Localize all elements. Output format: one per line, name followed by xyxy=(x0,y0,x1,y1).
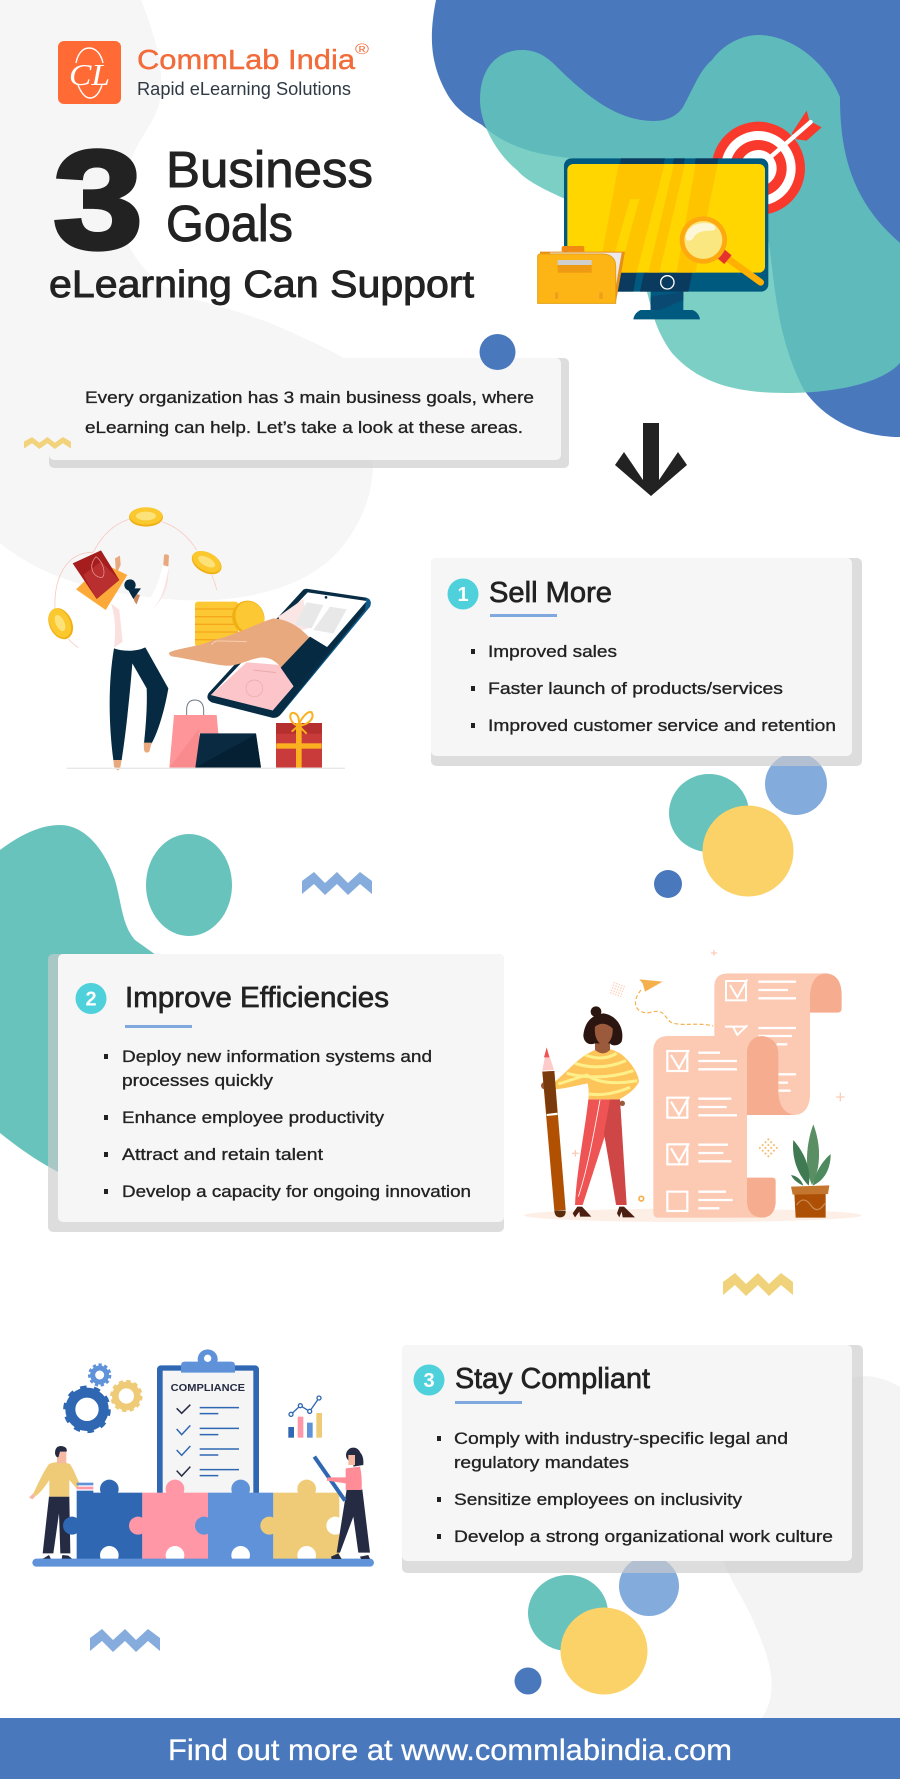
checklist xyxy=(177,1405,239,1476)
potted plant xyxy=(791,1124,831,1218)
number badge 2 xyxy=(76,983,106,1014)
ground line xyxy=(67,766,345,770)
decorative circles: section 3 xyxy=(514,1556,679,1694)
logo tagline: Rapid eLearning Solutions xyxy=(137,79,351,99)
logo mark: CL xyxy=(69,57,110,92)
icon: folder xyxy=(538,246,625,303)
woman figure with pencil xyxy=(314,1448,370,1559)
zigzag: yellow, section 2 xyxy=(723,1273,793,1296)
bullet list: processes quickly xyxy=(122,1071,274,1090)
bullet list: Enhance employee productivity xyxy=(122,1108,385,1127)
pink shopping bag xyxy=(169,700,218,768)
coins in the air xyxy=(43,507,225,643)
heading underline xyxy=(455,1401,522,1404)
panel face xyxy=(58,954,504,1222)
front scroll xyxy=(653,1036,795,1218)
bullet list xyxy=(104,1047,471,1201)
clipboard heading: COMPLIANCE xyxy=(171,1383,245,1394)
heading underline xyxy=(125,1025,192,1028)
bullet list: Sensitize employees on inclusivity xyxy=(454,1490,743,1509)
sparkles and dot patterns xyxy=(572,950,845,1201)
panel: sell more xyxy=(431,558,862,766)
illustration: compliance clipboard and puzzle xyxy=(29,1349,374,1567)
heading: Sell More: Sell More xyxy=(489,577,612,609)
gears xyxy=(65,1365,141,1431)
woman figure xyxy=(541,1006,639,1217)
arrow: pointing down xyxy=(615,423,687,496)
ground shadow xyxy=(524,1209,861,1222)
background blob: teal oval xyxy=(146,834,232,936)
panel face xyxy=(431,558,852,756)
shopping bags held xyxy=(73,550,127,610)
background blob: top-right blue xyxy=(432,0,900,437)
bullet list xyxy=(471,642,836,735)
number badge 3: 3 xyxy=(423,1370,435,1392)
title xyxy=(49,121,474,306)
icon: magnifying glass xyxy=(680,216,761,282)
icon: monitor xyxy=(564,158,768,319)
bullet list: Attract and retain talent xyxy=(122,1145,323,1164)
gift box xyxy=(276,712,322,768)
logo mark xyxy=(58,41,121,104)
pencil xyxy=(542,1047,566,1217)
icon: target with arrow xyxy=(712,111,822,215)
panel face xyxy=(402,1345,852,1561)
zigzag: blue, section 1 xyxy=(302,872,372,895)
footer band xyxy=(0,1718,900,1779)
illustration: shopping woman and phone xyxy=(43,507,371,770)
background blob: top-left grey xyxy=(0,0,373,600)
panel shadow xyxy=(48,954,504,1232)
man figure xyxy=(29,1446,93,1559)
illustration: monitor, target, folder xyxy=(538,111,822,319)
bullet list: Develop a capacity for ongoing innovation xyxy=(122,1182,471,1201)
title line: eLearning Can Support: eLearning Can Support xyxy=(49,264,474,306)
bullet list: Comply with industry-specific legal and xyxy=(454,1429,788,1448)
woman figure xyxy=(110,554,169,770)
bullet list: Faster launch of products/services xyxy=(488,679,783,698)
zigzag: blue, section 3 xyxy=(90,1629,160,1652)
back scroll xyxy=(714,973,842,1115)
bullet list xyxy=(437,1429,833,1546)
clipboard xyxy=(157,1349,259,1499)
title line: Business: Business xyxy=(166,141,373,198)
logo wordmark: CommLab India xyxy=(137,44,355,75)
heading: Stay Compliant: Stay Compliant xyxy=(455,1363,650,1395)
paper plane with dashed path xyxy=(635,979,713,1026)
panel: intro xyxy=(49,358,569,468)
dark shopping bag xyxy=(195,733,261,768)
number badge 1 xyxy=(448,578,478,610)
title line: Goals: Goals xyxy=(166,195,293,252)
intro text line 1: Every organization has 3 main business goals, where xyxy=(85,388,534,407)
panel shadow xyxy=(431,558,862,766)
logo xyxy=(58,41,369,104)
chart icon xyxy=(288,1396,322,1438)
puzzle pieces xyxy=(63,1480,344,1565)
decorative circles: section 1 xyxy=(654,753,827,898)
juggling arcs xyxy=(55,519,217,648)
number badge 2: 2 xyxy=(85,988,97,1010)
title numeral 3: 3 xyxy=(53,121,143,278)
footer text: Find out more at www.commlabindia.com xyxy=(168,1734,732,1767)
intro panel face xyxy=(49,358,561,460)
number badge 1: 1 xyxy=(457,584,469,606)
heading underline xyxy=(490,614,557,617)
zigzag: yellow, intro xyxy=(24,437,71,449)
background blob: bottom-right grey xyxy=(723,1376,900,1718)
panel: improve efficiencies xyxy=(48,954,504,1232)
panel: stay compliant xyxy=(402,1345,863,1573)
base bar xyxy=(32,1559,374,1567)
stack of coins xyxy=(195,595,270,647)
bullet list: Improved sales xyxy=(488,642,617,661)
background blob: top-right teal xyxy=(480,35,900,393)
hand and sleeve xyxy=(169,618,329,688)
intro panel shadow xyxy=(49,358,569,468)
panel shadow xyxy=(402,1345,863,1573)
bullet list: regulatory mandates xyxy=(454,1453,629,1472)
number badge 3 xyxy=(414,1364,444,1396)
heading: Improve Efficiencies: Improve Efficiencies xyxy=(125,982,389,1014)
bullet list: Develop a strong organizational work culture xyxy=(454,1527,833,1546)
intro text line 2: eLearning can help. Let’s take a look at these areas. xyxy=(85,418,523,437)
logo registered mark: ® xyxy=(355,41,369,58)
bullet list: Deploy new information systems and xyxy=(122,1047,432,1066)
phone xyxy=(207,589,371,718)
bullet list: Improved customer service and retention xyxy=(488,716,836,735)
decorative dot: blue xyxy=(480,334,516,370)
illustration: woman with pencil and checklist scrolls xyxy=(524,950,861,1222)
background blob: left teal xyxy=(0,825,170,1200)
